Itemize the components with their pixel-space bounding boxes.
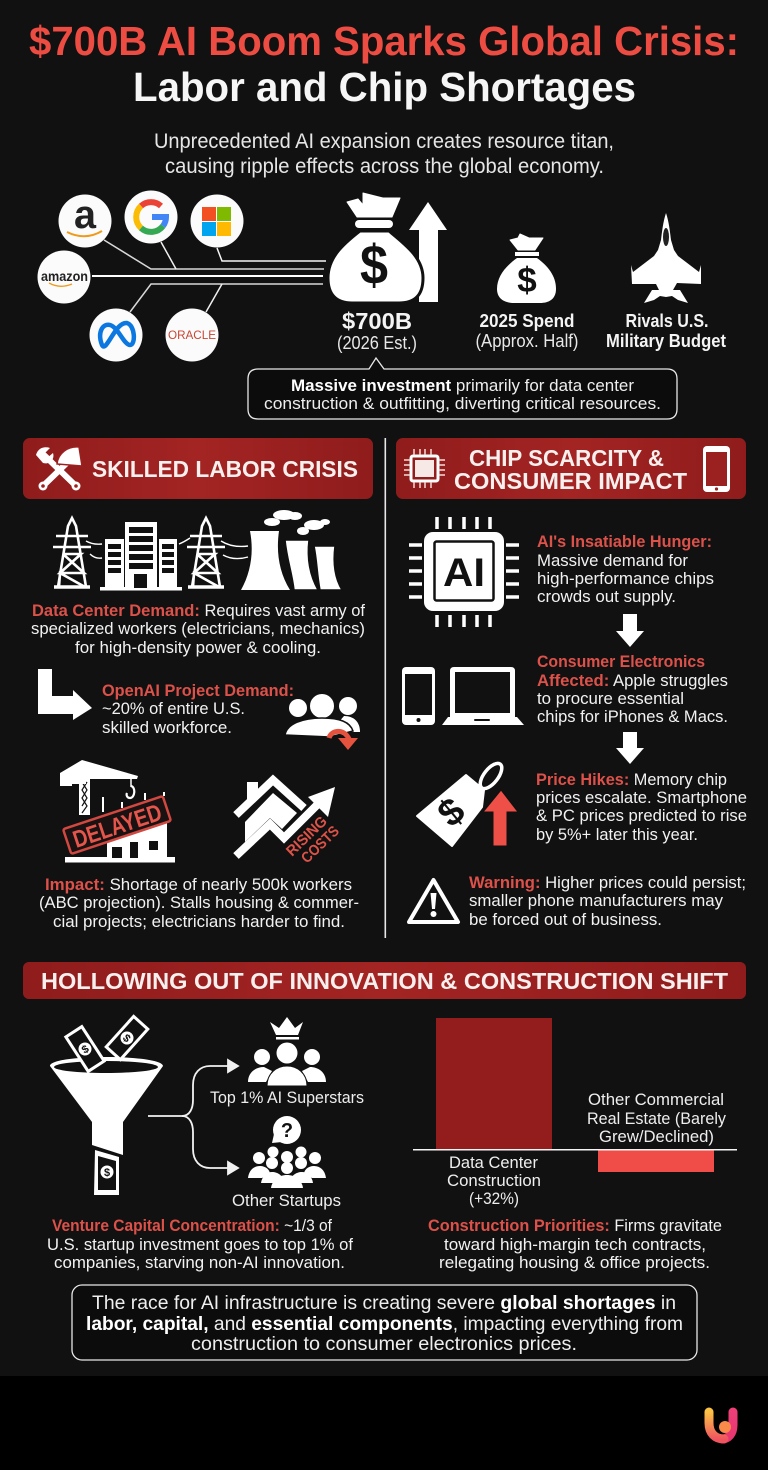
icon: cooling towers bbox=[241, 510, 342, 590]
panel header: chip scarcity bbox=[396, 438, 746, 499]
text: data center demand: for high-density power & cooling. bbox=[75, 638, 321, 657]
bar: other commercial real estate bbox=[598, 1150, 714, 1172]
icon: crowned superstars bbox=[248, 1017, 326, 1086]
arrow: down 1 bbox=[616, 614, 644, 647]
text: data center demand: Data Center Demand: Requires vast army of bbox=[32, 601, 365, 620]
panel header: hollowing out: HOLLOWING OUT OF INNOVATION & CONSTRUCTION SHIFT bbox=[41, 968, 728, 994]
icon: price tag with red arrow: $ bbox=[430, 790, 473, 836]
icon: phone and laptop bbox=[402, 667, 524, 725]
conclusion box: construction to consumer electronics prices. bbox=[191, 1334, 577, 1355]
subtitle: Unprecedented AI expansion creates resource titan, bbox=[154, 130, 614, 153]
icon: AI chip: AI bbox=[443, 551, 485, 595]
logo: amazon wordmark bbox=[38, 250, 90, 304]
text: top 1% AI superstars: Top 1% AI Superstars bbox=[210, 1088, 364, 1107]
conclusion box bbox=[72, 1285, 697, 1360]
text: venture capital concentration: U.S. startup investment goes to top 1% of bbox=[47, 1235, 353, 1254]
icon: rising costs house bbox=[236, 780, 343, 867]
text: AI's insatiable hunger bbox=[537, 532, 714, 606]
arrows: split to two groups bbox=[148, 1060, 238, 1174]
label: data center construction: (+32%) bbox=[469, 1189, 519, 1208]
icon: other startups with question: ? bbox=[281, 1120, 293, 1142]
text: warning: Warning: Higher prices could persist; bbox=[469, 873, 746, 892]
label: $700B bbox=[337, 308, 417, 353]
text: AI's insatiable hunger: Massive demand for bbox=[537, 551, 688, 570]
icon: workers with down arrow bbox=[285, 693, 360, 750]
icon: large money bag: $ bbox=[360, 233, 388, 296]
icon: AI chip bbox=[409, 517, 519, 627]
logo: microsoft bbox=[190, 194, 244, 248]
text: impact bbox=[39, 875, 359, 931]
icon: small money bag bbox=[497, 234, 556, 303]
text: openai project demand: OpenAI Project Demand: bbox=[102, 681, 294, 700]
logo: amazon wordmark: amazon bbox=[41, 268, 88, 284]
icon: large money bag bbox=[328, 193, 423, 303]
icon: rising costs house: COSTS bbox=[298, 823, 343, 867]
text: other startups: Other Startups bbox=[232, 1191, 341, 1210]
icon: header chip bbox=[404, 449, 445, 488]
label: other commercial: Real Estate (Barely bbox=[587, 1109, 726, 1128]
text: AI's insatiable hunger: AI's Insatiable Hunger: bbox=[537, 532, 712, 551]
icon: small money bag: $ bbox=[517, 261, 537, 300]
label: other commercial bbox=[587, 1090, 726, 1146]
icon row: power pylons, data center, cooling towers bbox=[53, 510, 342, 590]
icon: fighter jet bbox=[631, 213, 701, 303]
chart: construction growth bars bbox=[413, 1018, 737, 1208]
callout: massive investment: Massive investment primarily for data center bbox=[291, 376, 634, 395]
title: Labor and Chip Shortages bbox=[133, 64, 636, 110]
text: consumer electronics: chips for iPhones & Macs. bbox=[537, 707, 728, 726]
icon: elbow arrow bbox=[38, 669, 92, 720]
text: openai project demand: ~20% of entire U.S. bbox=[102, 699, 245, 718]
icon: data center building bbox=[100, 522, 182, 590]
conclusion box: labor, capital, and essential components, impacting everything from bbox=[86, 1314, 683, 1335]
text: venture capital concentration: companies, starving non-AI innovation. bbox=[54, 1253, 345, 1272]
label: 2025 spend: 2025 Spend bbox=[480, 311, 574, 331]
text: price hikes: & PC prices predicted to rise bbox=[536, 806, 747, 825]
text: construction priorities: Construction Priorities: Firms gravitate bbox=[428, 1216, 722, 1235]
panel header: skilled labor crisis: SKILLED LABOR CRISIS bbox=[92, 456, 358, 482]
icon: rising arrow bbox=[409, 202, 447, 302]
icon: delayed construction bbox=[60, 760, 175, 862]
text: openai project demand: skilled workforce. bbox=[102, 718, 232, 737]
text: impact: (ABC projection). Stalls housing & commer- bbox=[39, 893, 359, 912]
panel header: chip scarcity: CONSUMER IMPACT bbox=[454, 468, 687, 494]
icon: header phone bbox=[703, 446, 730, 492]
label: data center construction bbox=[447, 1153, 541, 1208]
text: consumer electronics: to procure essential bbox=[537, 689, 684, 708]
logo: amazon a bbox=[58, 193, 112, 248]
logo: oracle: ORACLE bbox=[168, 328, 216, 342]
icon: brand logo bbox=[709, 1412, 733, 1439]
icon: rising costs house: RISING bbox=[283, 813, 331, 860]
text: consumer electronics: Consumer Electronics bbox=[537, 652, 705, 671]
conclusion box: The race for AI infrastructure is creating severe global shortages in bbox=[92, 1293, 676, 1314]
logo: meta bbox=[90, 308, 142, 362]
label: rivals military budget: Rivals U.S. bbox=[626, 311, 708, 331]
callout: massive investment: construction & outfitting, diverting critical resources. bbox=[264, 394, 661, 413]
title bbox=[29, 18, 739, 110]
callout: massive investment bbox=[248, 358, 677, 419]
icon: funnel with money: $ bbox=[120, 1032, 133, 1045]
text: openai project demand bbox=[102, 681, 294, 737]
label: data center construction: Construction bbox=[447, 1171, 541, 1190]
icon: funnel with money: $ bbox=[104, 1167, 110, 1179]
text: warning bbox=[469, 873, 746, 929]
label: rivals military budget bbox=[606, 311, 726, 351]
text: impact: Impact: Shortage of nearly 500k workers bbox=[45, 875, 352, 894]
text: AI's insatiable hunger: high-performance chips bbox=[537, 569, 714, 588]
panel header: chip scarcity: CHIP SCARCITY & bbox=[469, 445, 664, 471]
icon: price tag with red arrow bbox=[417, 760, 518, 846]
connector lines from companies to money bag bbox=[92, 240, 326, 312]
text: venture capital concentration bbox=[47, 1216, 353, 1272]
text: price hikes: prices escalate. Smartphone bbox=[536, 788, 747, 807]
text: impact: cial projects; electricians harder to find. bbox=[53, 912, 345, 931]
icon: pylon right bbox=[187, 518, 225, 587]
label: 2025 spend: (Approx. Half) bbox=[476, 331, 578, 351]
label: $700B: $700B bbox=[342, 308, 412, 334]
label: data center construction: Data Center bbox=[449, 1153, 538, 1172]
text: warning: smaller phone manufacturers may bbox=[469, 891, 723, 910]
label: rivals military budget: Military Budget bbox=[606, 331, 726, 351]
icon: delayed construction: DELAYED bbox=[70, 799, 165, 854]
text: consumer electronics: Affected: Apple struggles bbox=[537, 671, 728, 690]
label: $700B: (2026 Est.) bbox=[337, 333, 417, 353]
panel header: hollowing out bbox=[23, 962, 746, 999]
text: consumer electronics bbox=[537, 652, 728, 726]
subtitle bbox=[154, 130, 614, 178]
subtitle: causing ripple effects across the global economy. bbox=[165, 155, 604, 178]
label: other commercial: Other Commercial bbox=[588, 1090, 724, 1109]
text: construction priorities: toward high-margin tech contracts, bbox=[444, 1235, 706, 1254]
text: warning: be forced out of business. bbox=[469, 910, 662, 929]
text: venture capital concentration: Venture Capital Concentration: ~1/3 of bbox=[52, 1216, 332, 1235]
icon: warning triangle bbox=[409, 880, 458, 922]
label: 2025 spend bbox=[476, 311, 578, 351]
icon: other startups with question bbox=[248, 1116, 326, 1188]
divider bbox=[384, 438, 386, 938]
text: price hikes: by 5%+ later this year. bbox=[536, 825, 698, 844]
bar: data center bbox=[436, 1018, 552, 1149]
text: price hikes bbox=[536, 770, 747, 844]
icon: pylon left bbox=[53, 518, 91, 587]
logo: google bbox=[124, 190, 178, 244]
text: AI's insatiable hunger: crowds out supply. bbox=[537, 587, 676, 606]
text: construction priorities: relegating housing & office projects. bbox=[439, 1253, 710, 1272]
logo: amazon a: a bbox=[74, 193, 97, 237]
text: construction priorities bbox=[428, 1216, 722, 1272]
title: $700B AI Boom Sparks Global Crisis: bbox=[29, 18, 739, 64]
logo: oracle bbox=[166, 308, 218, 362]
label: other commercial: Grew/Declined) bbox=[599, 1127, 714, 1146]
icon: funnel with money: $ bbox=[80, 1043, 91, 1057]
arrow: down 2 bbox=[616, 732, 644, 764]
icon: funnel with money bbox=[50, 1014, 163, 1195]
text: data center demand bbox=[31, 601, 365, 657]
icon: tools and hard hat bbox=[36, 447, 82, 490]
text: data center demand: specialized workers (electricians, mechanics) bbox=[31, 619, 365, 638]
text: price hikes: Price Hikes: Memory chip bbox=[536, 770, 727, 789]
panel header: skilled labor crisis bbox=[23, 438, 373, 499]
